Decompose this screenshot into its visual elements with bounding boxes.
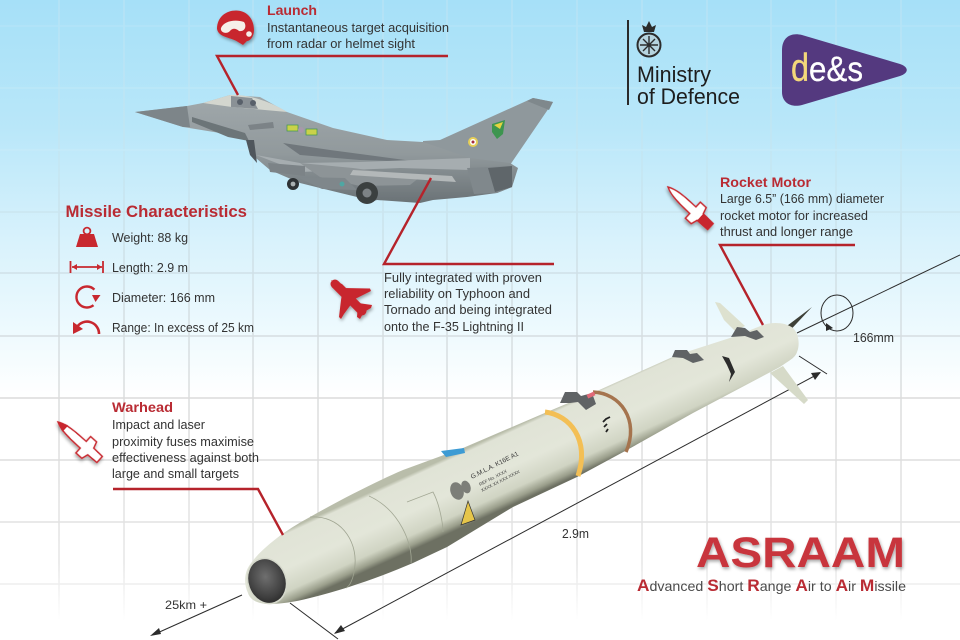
- subtitle: Advanced Short Range Air to Air Missile: [637, 576, 906, 595]
- nose seeker: [241, 553, 293, 609]
- callout: rocket motor: [660, 174, 885, 239]
- logo: de&s: e&s: [809, 50, 863, 89]
- title: ASRAAM: [637, 529, 906, 595]
- heading: Rocket Motor: [720, 174, 812, 190]
- missile markings: REF No. XXXX: [478, 469, 508, 487]
- stat: length: Length: 2.9 m: [112, 260, 188, 275]
- aircraft: Typhoon fighter: [135, 95, 553, 204]
- yellow band: [545, 412, 582, 476]
- wing: [283, 143, 420, 162]
- dimension: 166mm diameter: [797, 255, 960, 345]
- missile: [241, 302, 812, 609]
- callout: integration: [331, 178, 554, 334]
- canopy: [203, 95, 287, 112]
- tail fin: [423, 98, 553, 165]
- dimension: 2.9m length: 2.9m: [562, 527, 589, 541]
- text block: thrust and longer range: [720, 224, 853, 239]
- stat: range: Range: In excess of 25 km: [112, 320, 254, 335]
- canard: [192, 117, 249, 141]
- missile markings: G.M.L.A. K16E A1: [470, 450, 520, 481]
- sensor ovals: [448, 480, 466, 502]
- logo: Ministry of Defence: of Defence: [637, 84, 740, 109]
- icon: crest: [638, 21, 660, 56]
- text block: [720, 191, 885, 239]
- leader line: [384, 178, 554, 264]
- text block: Instantaneous target acquisition: [267, 20, 449, 35]
- launcher lugs: [560, 327, 764, 410]
- text block: rocket motor for increased: [720, 208, 868, 223]
- dimension: 25km range line: 25km +: [165, 598, 207, 612]
- text block: Fully integrated with proven: [384, 270, 542, 285]
- nose cone: [135, 106, 190, 127]
- heading: Launch: [267, 2, 317, 18]
- icon: rocket: [660, 179, 718, 235]
- callout: launch: [217, 2, 449, 95]
- engine nozzle: [467, 166, 512, 194]
- text block: Impact and laser: [112, 417, 206, 432]
- icon: length: [70, 261, 103, 273]
- logo: Ministry of Defence: [627, 20, 740, 109]
- icon: warhead missile: [51, 414, 107, 468]
- blue marking: [441, 448, 465, 457]
- callout: warhead: [51, 399, 259, 481]
- nose seam: [310, 517, 355, 588]
- text block: onto the F-35 Lightning II: [384, 319, 524, 334]
- text block: [267, 20, 449, 51]
- text block: Large 6.5” (166 mm) diameter: [720, 191, 885, 206]
- missile body: [245, 323, 799, 604]
- fins: [715, 302, 812, 404]
- heading: Warhead: [112, 399, 173, 415]
- text block: Tornado and being integrated: [384, 302, 552, 317]
- dimension: 166mm diameter: 166mm: [853, 331, 894, 345]
- missile markings: XXXX XX XXX XXXX: [480, 469, 521, 493]
- hatch and panels: [369, 492, 443, 563]
- leader line: rocket motor: [720, 245, 855, 325]
- icon: helmet: [217, 10, 254, 45]
- icon: range: [73, 322, 99, 334]
- dimension: 25km range line: [150, 595, 242, 636]
- title: ASRAAM: ASRAAM: [696, 529, 905, 577]
- landing gear: [287, 178, 299, 190]
- icon: plane: [331, 280, 372, 319]
- text block: from radar or helmet sight: [267, 36, 415, 51]
- text block: [384, 270, 552, 334]
- intake: [246, 140, 257, 163]
- fuselage: [135, 95, 518, 203]
- leader line: [217, 56, 448, 95]
- text block: [112, 417, 259, 481]
- dark seal graphic: [722, 356, 735, 382]
- laser warning triangle: [461, 501, 475, 525]
- panel: missile characteristics: [66, 203, 254, 335]
- text block: effectiveness against both: [112, 450, 259, 465]
- text block: large and small targets: [112, 466, 239, 481]
- stat: diameter: Diameter: 166 mm: [112, 290, 215, 305]
- heading: Missile Characteristics: [66, 203, 247, 221]
- dimension: 2.9m length: [290, 356, 827, 639]
- logo: de&s: d: [791, 47, 809, 90]
- text block: proximity fuses maximise: [112, 434, 254, 449]
- icon: weight: [76, 228, 98, 247]
- leader line: warhead: [113, 489, 283, 535]
- stat: weight: Weight: 88 kg: [112, 230, 188, 245]
- roundels and tail badge: [468, 137, 478, 147]
- fuel tank and stores: [300, 163, 420, 186]
- icon: diameter: [76, 286, 100, 307]
- text block: reliability on Typhoon and: [384, 286, 530, 301]
- logo: de&s: [782, 34, 907, 106]
- logo: Ministry of Defence: Ministry: [637, 62, 711, 87]
- tan band: [593, 392, 631, 452]
